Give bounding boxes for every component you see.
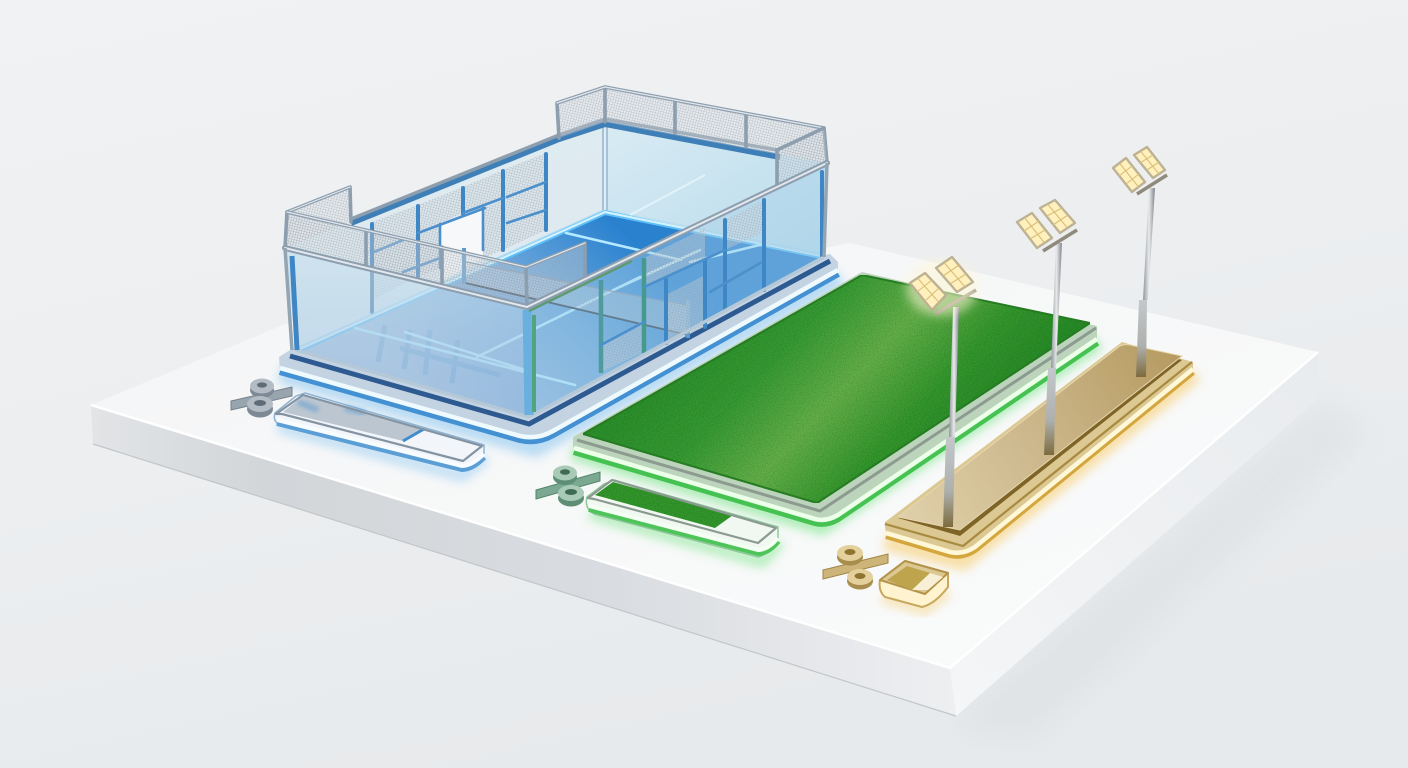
front-left glass wall: [285, 248, 529, 417]
gold lower plate: [885, 342, 1193, 556]
floor reflections: [378, 325, 500, 383]
green bar glow: [590, 514, 780, 562]
icon: gold percent sign: [823, 545, 888, 590]
floodlight pole 2: [1017, 200, 1077, 455]
gold glow: [885, 374, 1195, 562]
front-left fence: [285, 212, 527, 307]
plinth left face: [91, 405, 956, 716]
blue bar neon: [277, 423, 484, 469]
floodlight pole 1: [906, 257, 978, 527]
back upper mesh fences: [285, 87, 827, 248]
gold neon strip: [886, 372, 1193, 556]
turf neon strip: [574, 342, 1097, 523]
wall bottom rim: [296, 257, 824, 417]
court base glow: [280, 278, 840, 448]
court base dark rim: [290, 261, 830, 424]
court neon lines: [300, 212, 822, 385]
gold bar fill: [887, 566, 930, 590]
plinth top surface: [91, 243, 1318, 668]
court base neon strip: [280, 273, 838, 440]
upper frame rim behind: [351, 124, 780, 223]
right return fence: [777, 128, 827, 185]
back wall posts: [372, 154, 546, 312]
floodlight pole 3: [1113, 147, 1167, 377]
floodlight panels: [1017, 200, 1075, 248]
left corner post: [292, 256, 297, 350]
green bar frame: [588, 480, 776, 543]
turf glow: [572, 342, 1098, 527]
blue bar frame: [276, 395, 482, 461]
gold top plate: [898, 345, 1182, 530]
back-left glass wall: [285, 122, 605, 350]
mid vertical left wall: [370, 270, 374, 312]
front upper mesh fences: [285, 128, 827, 307]
back wall mesh panels: [372, 153, 546, 300]
plinth shadow: [960, 400, 1370, 740]
gold bar glow: [882, 592, 948, 610]
blue bar fill: [283, 396, 424, 441]
turf plate rim: [577, 328, 1096, 511]
plinth: [91, 243, 1370, 740]
front-right wall posts: [599, 280, 603, 373]
blue bar body: [274, 393, 484, 471]
blue bar glow: [278, 427, 486, 476]
front-right glass wall: [527, 163, 827, 417]
gold bar top: [880, 561, 948, 594]
icon: green percent sign: [536, 466, 600, 506]
back long fence: [605, 87, 824, 163]
floodlight panels: [1113, 147, 1165, 192]
turf plate: [573, 272, 1097, 520]
tennis net: [464, 248, 688, 338]
floodlight panels: [910, 257, 973, 310]
front return fence: [526, 243, 585, 307]
lighting base: gold: [885, 342, 1195, 562]
green bar fill: [595, 482, 733, 528]
plinth right face: [950, 352, 1318, 716]
back left fence: [557, 87, 605, 138]
green bar body: [586, 480, 778, 557]
turf panel: [572, 272, 1098, 527]
left return fence: [285, 187, 351, 248]
court base plate: [279, 254, 838, 440]
front-right wall mesh: [601, 200, 764, 372]
floodlight glow: [906, 260, 978, 316]
court floor: [296, 210, 824, 417]
progress bar: blue: [274, 393, 486, 476]
gold step: [885, 362, 1192, 546]
green bar neon: [589, 509, 778, 553]
gold bar body: [880, 561, 948, 607]
icon: blue percent sign: [231, 378, 292, 418]
main top frame: [285, 163, 827, 307]
turf surface: [583, 275, 1090, 503]
front corner post: [527, 310, 529, 415]
service and centre lines: [355, 233, 780, 385]
floor perimeter glow: [300, 212, 822, 349]
padel court: glass enclosure: [279, 87, 840, 448]
net posts: [464, 248, 688, 338]
progress bar: gold: [880, 561, 948, 610]
door opening: [440, 208, 483, 282]
back-right glass wall: [605, 122, 827, 257]
net mesh: [466, 262, 688, 335]
progress bar: green: [586, 480, 780, 562]
